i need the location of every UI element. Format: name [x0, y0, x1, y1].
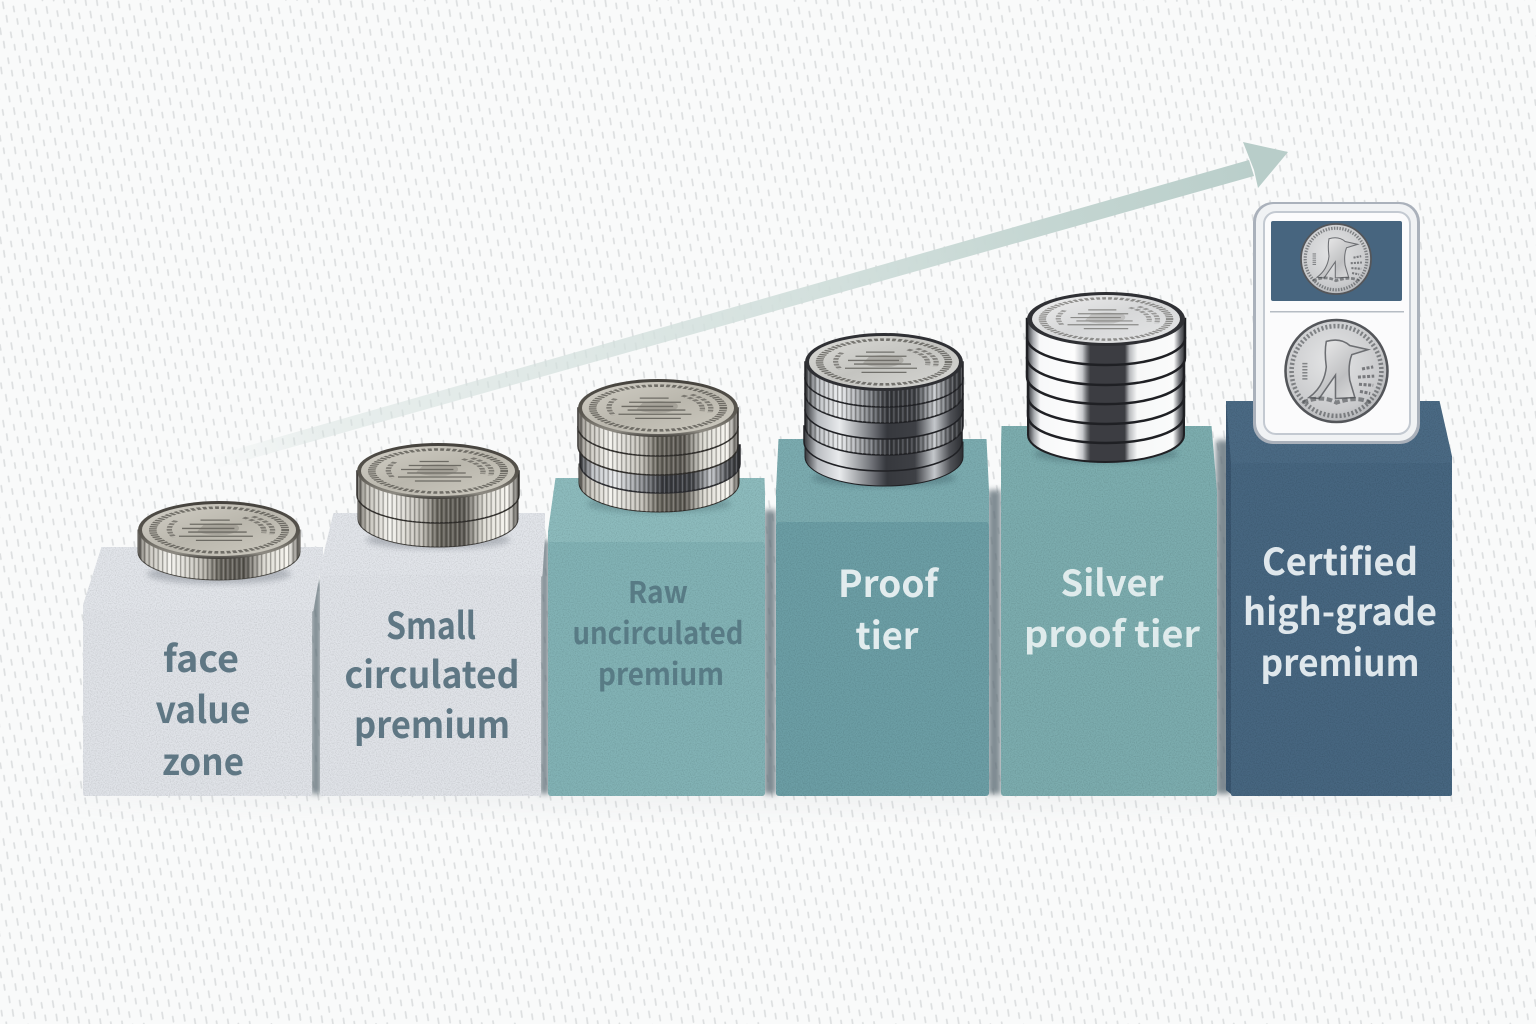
label: face value zone — [156, 629, 250, 786]
panel: face value zone block — [83, 547, 323, 796]
block gap shadows — [311, 440, 1231, 794]
label: certified high-grade premium: high-grade — [1243, 582, 1437, 636]
label: raw uncirculated premium — [572, 568, 744, 694]
block shape — [83, 547, 323, 796]
label: raw uncirculated premium: uncirculated — [572, 609, 744, 653]
label: silver proof tier: Silver — [1060, 555, 1164, 607]
block shape — [1226, 401, 1452, 796]
label: certified high-grade premium: Certified — [1262, 532, 1418, 586]
block shape — [776, 439, 989, 796]
label: face value zone: zone — [162, 732, 244, 786]
label: proof tier — [838, 554, 939, 660]
label: silver proof tier: proof tier — [1024, 606, 1200, 658]
arrow: rising value trend — [205, 142, 1288, 468]
slab label panel — [1271, 221, 1402, 301]
label: certified high-grade premium — [1243, 532, 1437, 687]
label: raw uncirculated premium: Raw — [628, 568, 688, 612]
label: proof tier: Proof — [838, 554, 939, 608]
icon: certified coin slab — [1253, 202, 1420, 444]
panel: proof tier block — [776, 439, 989, 796]
panel: small circulated premium block — [320, 513, 545, 796]
label: small circulated premium: circulated — [344, 645, 520, 699]
slab large coin — [1286, 320, 1388, 422]
icon: stack of six coins — [804, 333, 963, 487]
slab small coin — [1301, 224, 1371, 294]
block shape — [548, 478, 765, 796]
label: small circulated premium — [344, 596, 520, 749]
icon: stack of mirror silver coins — [1027, 292, 1185, 463]
label: face value zone: face — [163, 629, 239, 683]
panel: silver proof tier block — [1001, 426, 1217, 796]
label: raw uncirculated premium: premium — [598, 650, 724, 694]
label: proof tier: tier — [856, 606, 919, 660]
label: face value zone: value — [156, 680, 250, 734]
panel: raw uncirculated premium block — [548, 478, 765, 796]
label: small circulated premium: Small — [386, 596, 476, 650]
icon: single coin — [138, 501, 300, 584]
icon: stack of two coins — [357, 443, 519, 549]
label: silver proof tier — [1024, 555, 1200, 658]
icon: stack of four coins — [578, 379, 740, 513]
block shape — [1001, 426, 1217, 796]
panel: certified high-grade premium block — [1226, 401, 1452, 796]
label: small circulated premium: premium — [354, 695, 510, 749]
block shape — [320, 513, 545, 796]
label: certified high-grade premium: premium — [1260, 633, 1420, 687]
